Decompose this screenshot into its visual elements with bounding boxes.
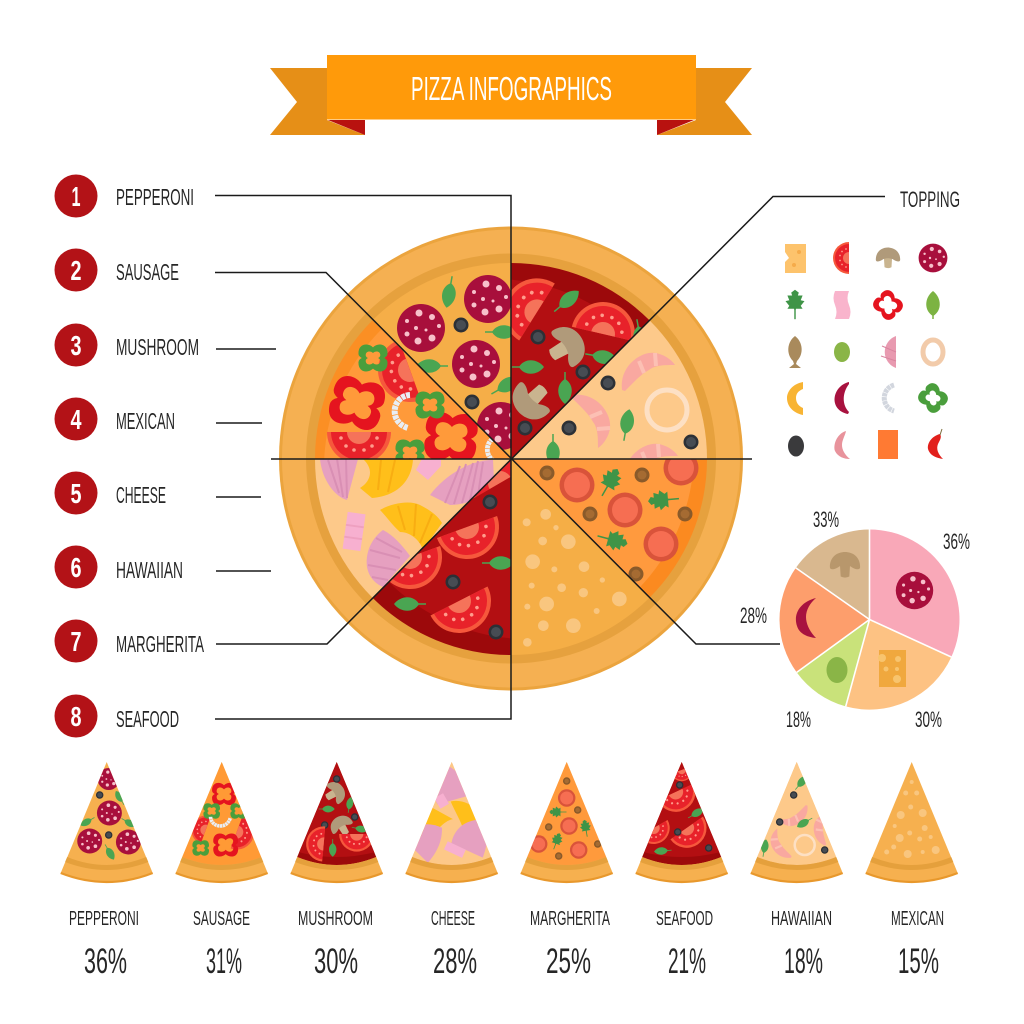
pizza chart xyxy=(279,226,743,690)
icon: red pepper xyxy=(870,287,906,323)
legend item 8 xyxy=(54,694,179,738)
pie sector: cheese xyxy=(846,620,951,710)
legend item 4: MEXICAN xyxy=(116,408,175,434)
legend item 8: SEAFOOD xyxy=(116,706,179,732)
numbered legend xyxy=(54,174,204,738)
caption: mushroom: 30% xyxy=(314,942,358,981)
pie sector: olive xyxy=(797,620,870,706)
topping pie chart xyxy=(740,507,970,732)
caption: pepperoni xyxy=(69,908,139,981)
caption: mushroom: MUSHROOM xyxy=(298,908,373,930)
topping heading: TOPPING xyxy=(900,187,960,212)
caption: margherita: MARGHERITA xyxy=(530,908,610,930)
slice names and percentages xyxy=(69,908,944,981)
caption: margherita xyxy=(530,908,610,981)
slice: margherita tomato xyxy=(374,461,510,655)
caption: seafood: 21% xyxy=(668,942,706,981)
pie icon: pepperoni xyxy=(896,572,933,609)
mini slice: margherita xyxy=(517,762,617,882)
ribbon band xyxy=(327,55,696,120)
legend item 6: 6 xyxy=(70,552,82,583)
pizza crust xyxy=(279,226,743,690)
icon: mushroom xyxy=(876,248,900,268)
caption: sausage xyxy=(193,908,250,981)
caption: sausage: SAUSAGE xyxy=(193,908,250,930)
icon: tomato xyxy=(833,242,849,274)
legend item 2 xyxy=(54,248,179,292)
mini slice: sausage xyxy=(172,762,272,882)
legend item 7: 7 xyxy=(70,626,82,657)
pie sector: pepperoni xyxy=(870,530,959,657)
legend item 7: MARGHERITA xyxy=(116,631,204,657)
legend item 3: 3 xyxy=(70,330,82,361)
caption: pepperoni: 36% xyxy=(84,942,127,981)
caption: mushroom xyxy=(298,908,373,981)
pie icon: olive xyxy=(826,657,848,683)
slice row xyxy=(61,762,958,882)
title ribbon xyxy=(270,55,752,135)
caption: mexican xyxy=(891,908,944,981)
slice: cheese xyxy=(512,460,649,655)
caption: seafood: SEAFOOD xyxy=(656,908,713,930)
caption: pepperoni: PEPPERONI xyxy=(69,908,139,930)
slice: hawaiian xyxy=(315,460,510,598)
slice: margherita xyxy=(514,460,707,597)
slice: seafood xyxy=(513,321,707,458)
legend item 1: 1 xyxy=(72,181,80,212)
legend item 2: SAUSAGE xyxy=(116,259,179,285)
icon: pineapple xyxy=(787,382,803,415)
legend item 6 xyxy=(54,546,183,588)
icon: cheese xyxy=(785,244,806,273)
ribbon left fold xyxy=(328,120,365,135)
legend item 2: 2 xyxy=(70,255,82,286)
caption: cheese xyxy=(431,908,477,981)
legend item 1: PEPPERONI xyxy=(116,184,194,210)
icon: anchovy xyxy=(788,336,802,368)
pie icon: mushroom xyxy=(830,552,860,578)
caption: margherita: 25% xyxy=(546,942,591,981)
legend item 7 xyxy=(54,620,204,662)
ribbon left tail xyxy=(270,68,365,135)
slice: pepperoni xyxy=(374,263,510,456)
ribbon right fold xyxy=(657,120,694,135)
legend item 3 xyxy=(54,324,199,366)
slice: mushroom xyxy=(512,263,649,458)
legend item 4: 4 xyxy=(70,404,82,435)
legend item 3: MUSHROOM xyxy=(116,334,199,360)
caption: mexican: 15% xyxy=(898,942,939,981)
icon: shrimp xyxy=(834,431,850,459)
legend item 6: HAWAIIAN xyxy=(116,557,183,583)
topping icon grid xyxy=(785,242,951,459)
mini slice: cheese xyxy=(401,762,502,882)
caption: hawaiian: HAWAIIAN xyxy=(771,908,832,930)
icon: basil xyxy=(926,291,940,319)
pie label 30%: 30% xyxy=(915,707,942,732)
mini slice: mexican xyxy=(866,762,958,882)
mini slice: mushroom xyxy=(287,762,387,882)
pie icon: cheese xyxy=(878,650,906,687)
caption: hawaiian: 18% xyxy=(784,942,823,981)
pie label 36%: 36% xyxy=(943,529,970,554)
mini slice: seafood xyxy=(632,762,732,882)
caption: cheese: CHEESE xyxy=(431,908,475,930)
pie label 18%: 18% xyxy=(786,707,811,732)
title: PIZZA INFOGRAPHICS xyxy=(411,70,612,107)
legend item 1 xyxy=(54,174,194,218)
legend item 4 xyxy=(54,398,175,440)
icon: pepperoni xyxy=(919,244,947,272)
legend item 8: 8 xyxy=(70,701,82,732)
icon: squid ring xyxy=(884,385,894,411)
caption: cheese: 28% xyxy=(433,942,477,981)
icon: sausage xyxy=(835,382,849,414)
icon: green olive xyxy=(834,342,850,362)
legend item 5: 5 xyxy=(70,478,82,509)
pie sector: sausage xyxy=(780,568,870,672)
legend item 5: CHEESE xyxy=(116,482,166,508)
icon: salmon xyxy=(878,430,898,459)
icon: green pepper xyxy=(915,380,951,416)
icon: chili xyxy=(928,429,943,459)
icon: bacon xyxy=(834,291,850,319)
icon: onion xyxy=(881,336,896,368)
mini slice: hawaiian xyxy=(747,762,847,882)
caption: hawaiian xyxy=(771,908,832,981)
caption: mexican: MEXICAN xyxy=(891,908,944,930)
pie label 28%: 28% xyxy=(740,603,767,628)
caption: sausage: 31% xyxy=(206,942,242,981)
icon: arugula xyxy=(786,290,804,319)
pie sector: mushroom xyxy=(796,530,870,620)
slice: sausage xyxy=(315,320,510,458)
leader lines xyxy=(215,196,885,719)
pie label 33%: 33% xyxy=(813,507,839,532)
mini slice: pepperoni xyxy=(61,762,153,882)
legend item 5 xyxy=(54,472,166,514)
ribbon right tail xyxy=(657,68,752,135)
pie icon: sausage xyxy=(796,598,816,638)
caption: seafood xyxy=(656,908,713,981)
icon: onion ring xyxy=(923,340,943,364)
icon: black olive xyxy=(788,436,804,456)
